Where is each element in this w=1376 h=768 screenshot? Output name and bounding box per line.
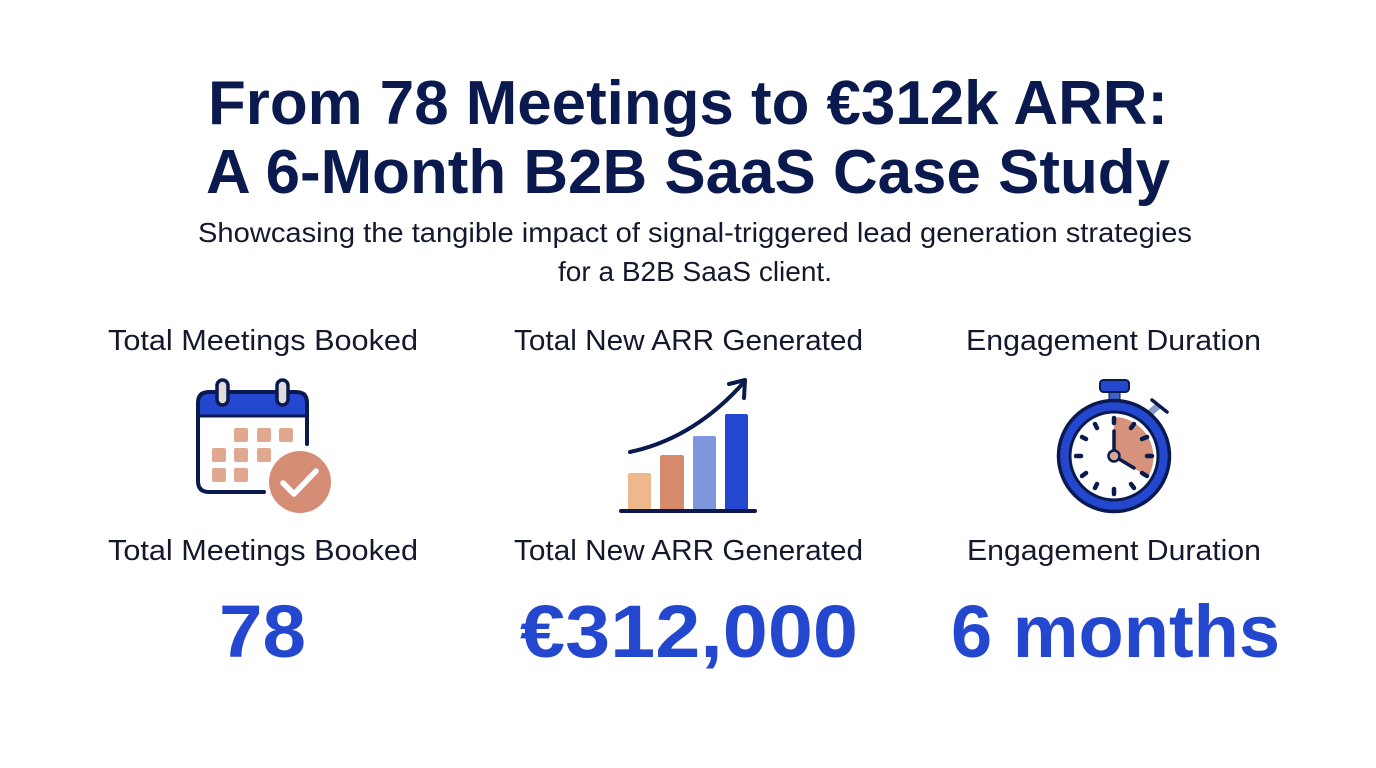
label: engagement duration: Engagement Duration: [967, 535, 1261, 567]
title: From 78 Meetings to €312k ARR:: [208, 69, 1168, 138]
subtitle: for a B2B SaaS client.: [558, 256, 832, 287]
icon: stopwatch: [1058, 380, 1170, 512]
heading: engagement duration: Engagement Duration: [966, 325, 1261, 357]
heading: total new arr generated: Total New ARR Generated: [514, 325, 863, 357]
label: total new arr generated: Total New ARR Generated: [514, 535, 863, 567]
icon: growth bar chart with arrow: [621, 380, 755, 511]
subtitle: [198, 217, 1192, 287]
value: 78: 78: [219, 590, 306, 673]
title: A 6-Month B2B SaaS Case Study: [206, 138, 1171, 207]
panel: engagement duration: [951, 325, 1280, 673]
icon: calendar with check: [198, 380, 331, 513]
title: [206, 69, 1171, 207]
panel: total meetings booked: [108, 325, 418, 673]
heading: total meetings booked: Total Meetings Booked: [108, 325, 418, 357]
label: total meetings booked: Total Meetings Booked: [108, 535, 418, 567]
value: 6 months: 6 months: [951, 590, 1280, 673]
panel: total new arr generated: [514, 325, 863, 673]
subtitle: Showcasing the tangible impact of signal-triggered lead generation strategies: [198, 217, 1192, 248]
value: €312,000: €312,000: [520, 590, 858, 673]
